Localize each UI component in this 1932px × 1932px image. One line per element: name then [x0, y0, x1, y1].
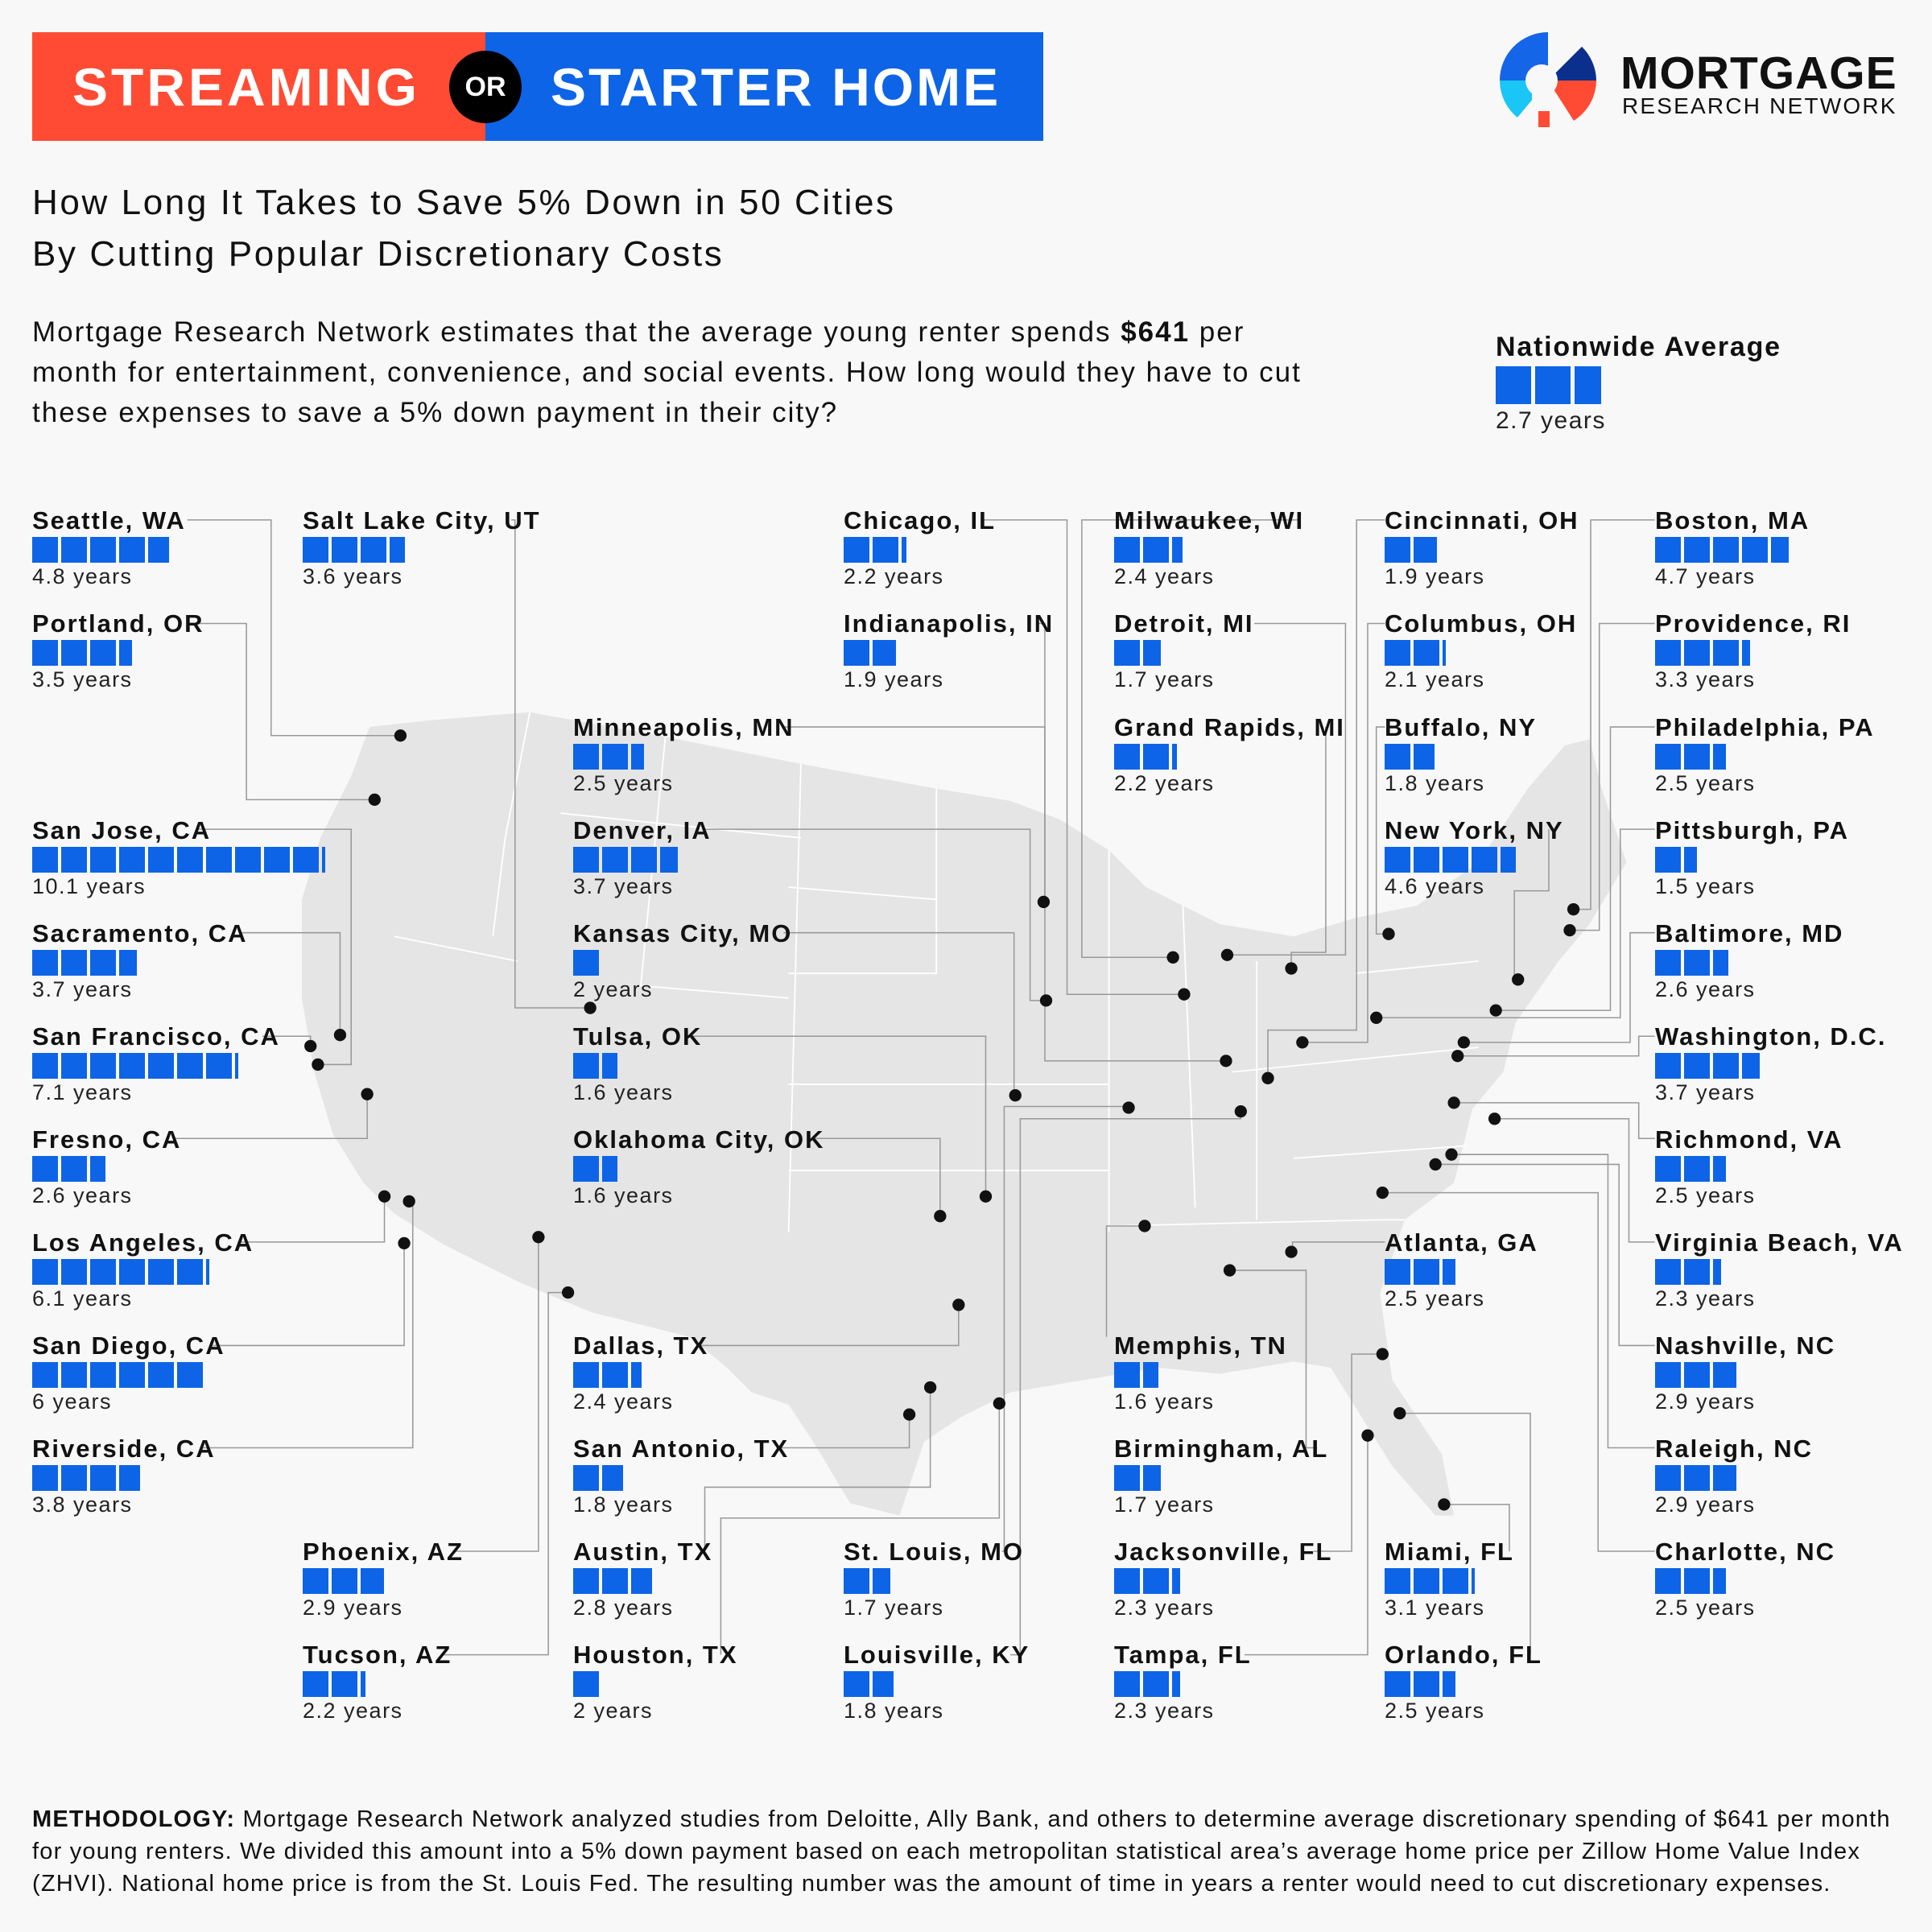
- city: Columbus: [1385, 609, 1577, 691]
- city: Birmingham: [1114, 1435, 1328, 1517]
- city: Pittsburgh: Pittsburgh, PA: [1655, 816, 1849, 844]
- header banner: STREAMING: [72, 57, 420, 117]
- city: Los Angeles: Los Angeles, CA: [32, 1228, 254, 1257]
- city: Minneapolis: 2.5 years: [573, 771, 674, 795]
- city: Riverside: Riverside, CA: [32, 1435, 216, 1463]
- city: Salt Lake City: [303, 506, 541, 588]
- methodology: (ZHVI). National home price is from the St. Louis Fed. The resulting number was the amount of time in years a renter would need to cut discretionary expenses.: [32, 1871, 1831, 1897]
- city: Jacksonville: Jacksonville, FL: [1114, 1538, 1333, 1566]
- city: Milwaukee: 2.4 years: [1114, 564, 1215, 588]
- city: Riverside: [32, 1435, 216, 1517]
- city: Kansas City: Kansas City, MO: [573, 919, 792, 947]
- city: San Diego: 6 years: [32, 1389, 112, 1414]
- city: Sacramento: Sacramento, CA: [32, 919, 247, 947]
- city: Austin: [573, 1538, 712, 1620]
- city: Chicago: [844, 506, 996, 588]
- city: Phoenix: 2.9 years: [303, 1596, 403, 1620]
- city: Pittsburgh: 1.5 years: [1655, 874, 1756, 898]
- city: Cincinnati: 1.9 years: [1385, 564, 1485, 588]
- city: New York: [1385, 816, 1642, 905]
- city: Orlando: Orlando, FL: [1385, 1641, 1542, 1669]
- city: Raleigh: 2.9 years: [1655, 1492, 1756, 1517]
- subtitle: [32, 183, 896, 274]
- city: Grand Rapids: Grand Rapids, MI: [1114, 713, 1345, 741]
- city: Buffalo: 1.8 years: [1385, 771, 1485, 795]
- city: Raleigh: [1655, 1435, 1913, 1523]
- city: Phoenix: [303, 1538, 464, 1620]
- city: Seattle: Seattle, WA: [32, 506, 186, 535]
- city: Richmond: [1655, 1125, 1913, 1214]
- city: Denver IA: 3.7 years: [573, 874, 674, 898]
- city: Portland: [32, 609, 204, 691]
- city: Baltimore: Baltimore, MD: [1655, 919, 1843, 947]
- city: Tucson: 2.2 years: [303, 1699, 403, 1723]
- nationwide average: Nationwide Average: [1496, 332, 1781, 362]
- city: Jacksonville: [1114, 1538, 1333, 1620]
- city: San Antonio: San Antonio, TX: [573, 1435, 789, 1463]
- city: Miami: 3.1 years: [1385, 1596, 1485, 1620]
- city: Charlotte: Charlotte, NC: [1655, 1538, 1835, 1566]
- city: San Jose: San Jose, CA: [32, 816, 211, 844]
- city: Dallas: [573, 1331, 708, 1414]
- city: Tucson: Tucson, AZ: [303, 1641, 452, 1669]
- city: Providence: 3.3 years: [1655, 667, 1756, 691]
- city: Sacramento: [32, 919, 247, 1001]
- city: Philadelphia: [1655, 713, 1913, 802]
- city: Kansas City: [573, 919, 792, 1001]
- city: Cincinnati: [1385, 506, 1579, 588]
- city: Fresno: Fresno, CA: [32, 1125, 181, 1154]
- city: Houston: 2 years: [573, 1699, 653, 1723]
- subtitle: How Long It Takes to Save 5% Down in 50 Cities: [32, 183, 896, 222]
- methodology: METHODOLOGY: Mortgage Research Network analyzed studies from Deloitte, Ally Bank, and others to determine average discretionary spending of $641 per month: [32, 1806, 1891, 1832]
- header banner: STARTER HOME: [551, 57, 1001, 117]
- city: Virginia Beach: [1655, 1228, 1913, 1317]
- city: Tampa: 2.3 years: [1114, 1699, 1215, 1723]
- subtitle: By Cutting Popular Discretionary Costs: [32, 234, 724, 274]
- city: Sacramento: 3.7 years: [32, 977, 133, 1001]
- intro paragraph: month for entertainment, convenience, and social events. How long would they have to cut: [32, 357, 1302, 388]
- city: Columbus: 2.1 years: [1385, 667, 1485, 691]
- city: Atlanta: 2.5 years: [1385, 1286, 1485, 1311]
- city: Tampa: Tampa, FL: [1114, 1641, 1252, 1669]
- city: Tampa: [1114, 1641, 1252, 1723]
- city: Oklahoma City: 1.6 years: [573, 1183, 674, 1208]
- city: Indianapolis: 1.9 years: [844, 667, 944, 691]
- city: Atlanta: [1385, 1228, 1642, 1317]
- city: Boston: [1655, 506, 1913, 595]
- city: Seattle: [32, 506, 186, 588]
- city: Detroit: Detroit, MI: [1114, 609, 1254, 638]
- city: Washington: Washington, D.C.: [1655, 1022, 1886, 1051]
- city: Jacksonville: 2.3 years: [1114, 1596, 1215, 1620]
- city: San Jose: [32, 816, 325, 898]
- city: San Francisco: 7.1 years: [32, 1080, 133, 1104]
- intro paragraph: these expenses to save a 5% down payment in their city?: [32, 397, 838, 428]
- logo: RESEARCH NETWORK: [1622, 93, 1897, 118]
- city: Portland: 3.5 years: [32, 667, 133, 691]
- city: San Francisco: San Francisco, CA: [32, 1022, 280, 1051]
- city: Cincinnati: Cincinnati, OH: [1385, 506, 1579, 535]
- city: Denver IA: [573, 816, 712, 898]
- city: Birmingham: Birmingham, AL: [1114, 1435, 1328, 1463]
- city: Providence: Providence, RI: [1655, 609, 1851, 638]
- city: Washington: 3.7 years: [1655, 1080, 1756, 1104]
- city: Milwaukee: Milwaukee, WI: [1114, 506, 1304, 535]
- city: San Antonio: 1.8 years: [573, 1492, 674, 1517]
- city: San Diego: [32, 1331, 225, 1414]
- nationwide average: [1496, 332, 1781, 434]
- city: Denver IA: Denver, IA: [573, 816, 712, 844]
- city: Memphis: [1114, 1331, 1287, 1414]
- city: Birmingham: 1.7 years: [1114, 1492, 1215, 1517]
- city: Milwaukee: [1114, 506, 1304, 588]
- city: Virginia Beach: 2.3 years: [1655, 1286, 1756, 1311]
- city: St. Louis: St. Louis, MO: [844, 1538, 1024, 1566]
- methodology: for young renters. We divided this amount into a 5% down payment based on each metropolitan statistical area’s average home price per Zillow Home Value Index: [32, 1839, 1860, 1864]
- city: Virginia Beach: Virginia Beach, VA: [1655, 1228, 1904, 1257]
- intro paragraph: Mortgage Research Network estimates that the average young renter spends $641 per: [32, 316, 1245, 348]
- city: Boston: Boston, MA: [1655, 506, 1810, 535]
- city: Miami: Miami, FL: [1385, 1538, 1514, 1566]
- city: Miami: [1385, 1538, 1642, 1626]
- city: Memphis: 1.6 years: [1114, 1389, 1215, 1414]
- city: Chicago: Chicago, IL: [844, 506, 996, 535]
- city: Orlando: [1385, 1641, 1642, 1729]
- city: Buffalo: Buffalo, NY: [1385, 713, 1537, 741]
- logo: [1500, 32, 1897, 127]
- city: Los Angeles: [32, 1228, 254, 1311]
- city: Seattle: 4.8 years: [32, 564, 133, 588]
- city: St. Louis: [844, 1538, 1024, 1620]
- city: New York: New York, NY: [1385, 816, 1564, 844]
- city: Pittsburgh: [1655, 816, 1913, 905]
- city: Nashville: 2.9 years: [1655, 1389, 1756, 1414]
- city: Dallas: Dallas, TX: [573, 1331, 708, 1360]
- logo: MORTGAGE: [1620, 47, 1897, 99]
- city: Washington: [1655, 1022, 1913, 1111]
- city: Grand Rapids: 2.2 years: [1114, 771, 1215, 795]
- city: New York: 4.6 years: [1385, 874, 1485, 898]
- city: Louisville: [844, 1641, 1030, 1723]
- city: Baltimore: 2.6 years: [1655, 977, 1756, 1001]
- city: Charlotte: [1655, 1538, 1913, 1626]
- city: Tulsa: [573, 1022, 702, 1104]
- city: Fresno: [32, 1125, 181, 1208]
- city: Oklahoma City: [573, 1125, 824, 1208]
- city: Raleigh: Raleigh, NC: [1655, 1435, 1813, 1463]
- city: Houston: [573, 1641, 738, 1723]
- city: Los Angeles: 6.1 years: [32, 1286, 133, 1311]
- city: San Diego: San Diego, CA: [32, 1331, 225, 1360]
- city: Richmond: 2.5 years: [1655, 1183, 1756, 1208]
- city: Austin: 2.8 years: [573, 1596, 674, 1620]
- city: Columbus: Columbus, OH: [1385, 609, 1577, 638]
- header banner: OR: [465, 72, 506, 102]
- city: Philadelphia: Philadelphia, PA: [1655, 713, 1875, 741]
- city: Indianapolis: Indianapolis, IN: [844, 609, 1054, 638]
- city: Boston: 4.7 years: [1655, 564, 1756, 588]
- city: Salt Lake City: 3.6 years: [303, 564, 403, 588]
- city: Indianapolis: [844, 609, 1054, 691]
- city: Oklahoma City: Oklahoma City, OK: [573, 1125, 824, 1154]
- city: Riverside: 3.8 years: [32, 1492, 133, 1517]
- city: Phoenix: Phoenix, AZ: [303, 1538, 464, 1566]
- city: Chicago: 2.2 years: [844, 564, 944, 588]
- city: St. Louis: 1.7 years: [844, 1596, 944, 1620]
- city: Nashville: [1655, 1331, 1913, 1420]
- nationwide average: 2.7 years: [1496, 407, 1606, 434]
- city: Charlotte: 2.5 years: [1655, 1596, 1756, 1620]
- intro paragraph: [32, 316, 1302, 428]
- city: Grand Rapids: [1114, 713, 1345, 795]
- city: Tulsa: 1.6 years: [573, 1080, 674, 1104]
- city: Dallas: 2.4 years: [573, 1389, 674, 1414]
- city: Minneapolis: [573, 713, 795, 795]
- city: Orlando: 2.5 years: [1385, 1699, 1485, 1723]
- city: Baltimore: [1655, 919, 1913, 1008]
- city: Richmond: Richmond, VA: [1655, 1125, 1843, 1154]
- city: Minneapolis: Minneapolis, MN: [573, 713, 795, 741]
- city: Kansas City: 2 years: [573, 977, 653, 1001]
- city: Detroit: 1.7 years: [1114, 667, 1215, 691]
- city: Tucson: [303, 1641, 452, 1723]
- city: San Antonio: [573, 1435, 789, 1517]
- city: Detroit: [1114, 609, 1254, 691]
- city: Salt Lake City: Salt Lake City, UT: [303, 506, 541, 535]
- city: San Jose: 10.1 years: [32, 874, 146, 898]
- city: Austin: Austin, TX: [573, 1538, 712, 1566]
- city: Houston: Houston, TX: [573, 1641, 738, 1669]
- city: Portland: Portland, OR: [32, 609, 204, 638]
- city: Louisville: 1.8 years: [844, 1699, 944, 1723]
- city: Louisville: Louisville, KY: [844, 1641, 1030, 1669]
- methodology: [32, 1803, 1891, 1900]
- city: Nashville: Nashville, NC: [1655, 1331, 1835, 1360]
- city: Fresno: 2.6 years: [32, 1183, 133, 1208]
- city: Tulsa: Tulsa, OK: [573, 1022, 702, 1051]
- city: Providence: [1655, 609, 1913, 698]
- city: Philadelphia: 2.5 years: [1655, 771, 1756, 795]
- city: Buffalo: [1385, 713, 1537, 795]
- city: Memphis: Memphis, TN: [1114, 1331, 1287, 1360]
- city: San Francisco: [32, 1022, 280, 1104]
- header banner: [32, 32, 1043, 141]
- city: Atlanta: Atlanta, GA: [1385, 1228, 1538, 1257]
